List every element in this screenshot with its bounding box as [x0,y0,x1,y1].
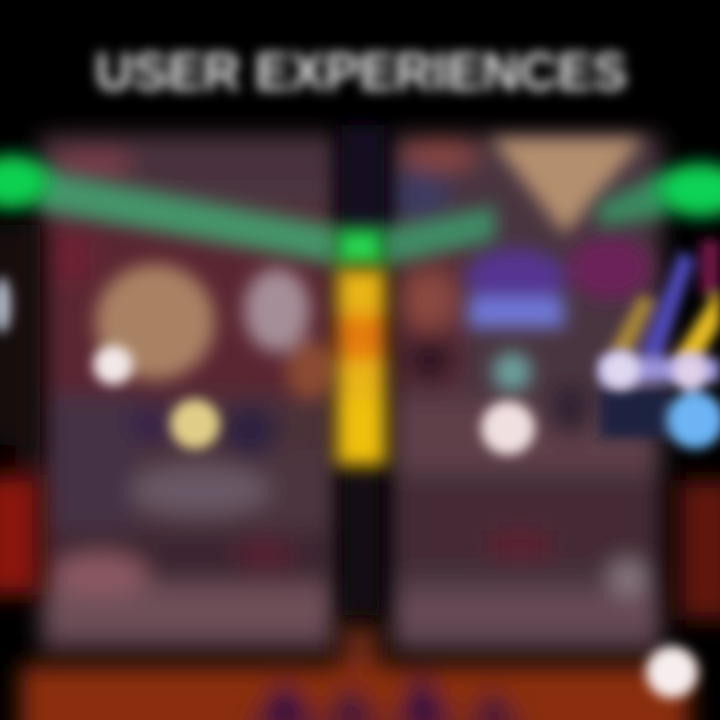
bright ends [0,155,720,266]
bottom strip [20,625,690,720]
title: USER EXPERIENCES [95,42,627,102]
yellow column [336,268,386,466]
green banner [0,155,720,266]
panel: left [40,135,337,655]
panel: right [390,135,662,655]
right band [385,173,665,266]
tan circle [95,264,215,380]
highlight dots [0,277,720,698]
blue purple block [465,236,652,392]
tan triangle [490,138,645,235]
pale blob [244,268,334,400]
center column [342,125,384,615]
left band [40,170,335,264]
side red blocks [0,225,720,620]
rainbow stripes [600,240,720,438]
